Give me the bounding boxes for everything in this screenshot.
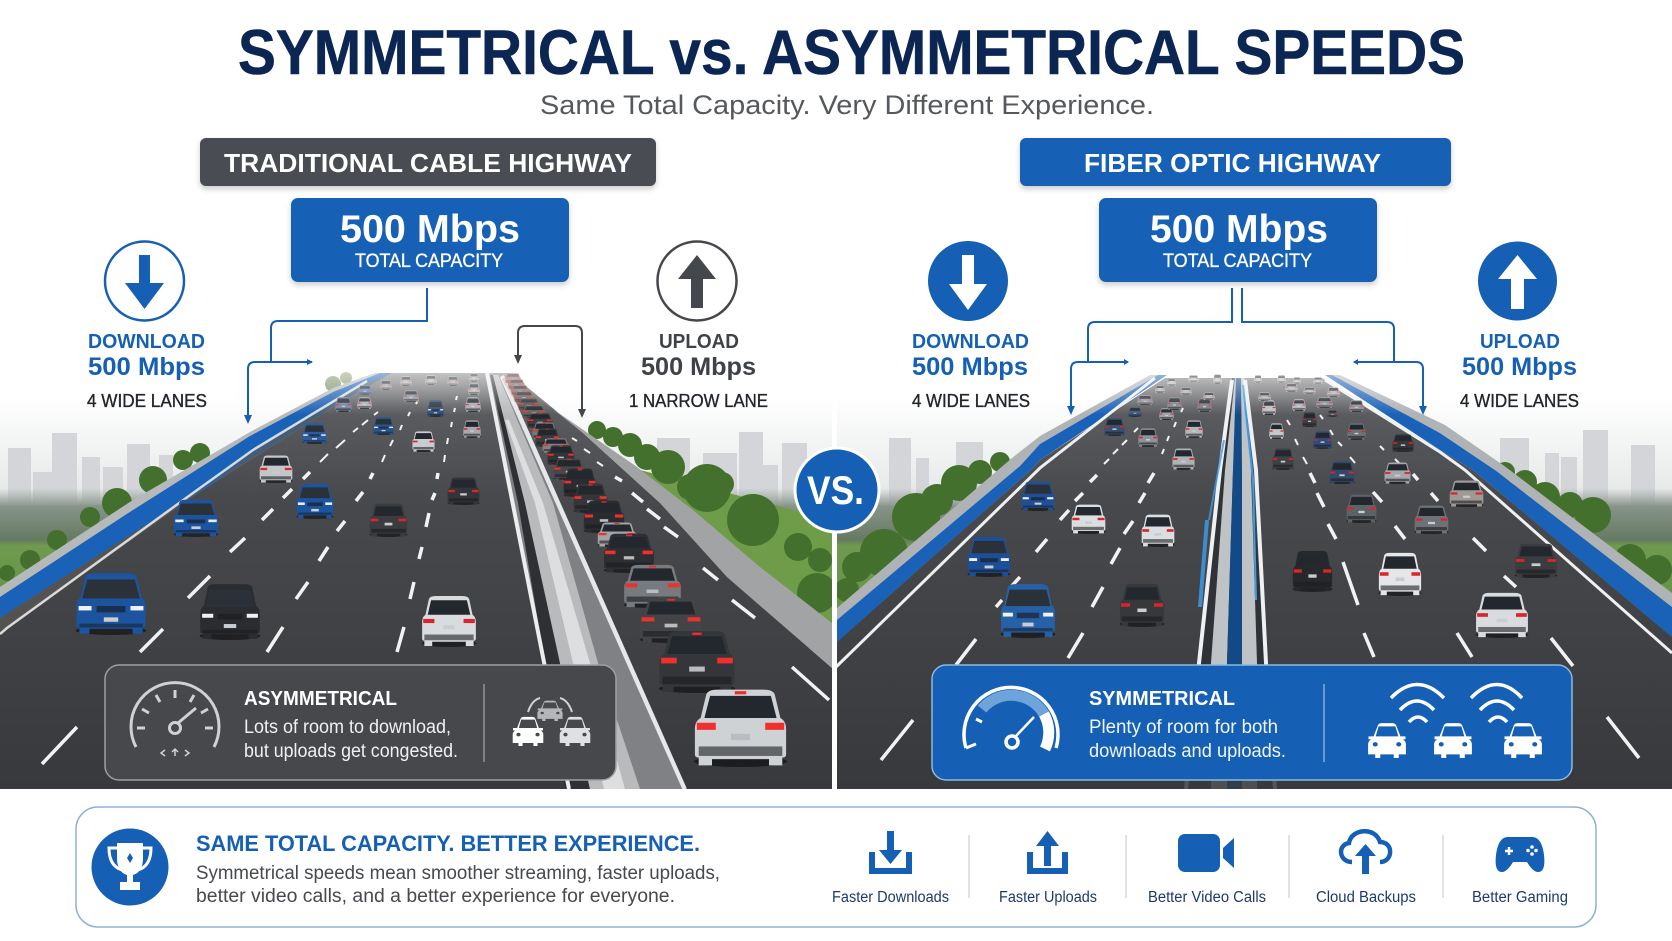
arrow: cable download connector	[244, 288, 427, 424]
icon: better video calls	[1148, 834, 1266, 906]
icon: congested cars	[513, 698, 590, 746]
text: fiber download stats: 500 Mbps	[912, 353, 1028, 381]
text: cable download stats: DOWNLOAD	[88, 331, 205, 353]
icon: faster uploads: Faster Uploads	[999, 889, 1097, 906]
icon: download circle filled	[928, 241, 1008, 321]
callout: symmetrical	[932, 665, 1572, 780]
arrow: cable upload connector	[514, 326, 586, 418]
text: fiber download stats: 4 WIDE LANES	[912, 391, 1030, 411]
text: symmetrical description: downloads and uploads.	[1089, 741, 1286, 762]
capacity box: cable: 500 Mbps	[340, 208, 520, 251]
icon: cloud backups	[1316, 831, 1416, 906]
lane dashes: cable	[42, 396, 829, 764]
text: summary: Symmetrical speeds mean smoother streaming, faster uploads,	[196, 863, 720, 884]
capacity box: fiber: 500 Mbps	[1150, 208, 1328, 251]
header: fiber optic highway	[1020, 138, 1451, 186]
text: fiber upload stats	[1460, 331, 1579, 411]
text: fiber upload stats: 4 WIDE LANES	[1460, 391, 1579, 411]
text: fiber download stats: DOWNLOAD	[912, 331, 1029, 353]
text: fiber upload stats: 500 Mbps	[1462, 353, 1577, 381]
icon: cloud backups: Cloud Backups	[1316, 889, 1416, 906]
icon: upload circle filled	[1478, 242, 1557, 320]
text: asymmetrical description: ASYMMETRICAL	[244, 688, 397, 710]
badge: VS: VS.	[807, 469, 864, 513]
text: summary: better video calls, and a better experience for everyone.	[196, 886, 675, 907]
text: cable upload stats: 500 Mbps	[641, 353, 756, 381]
text: summary	[196, 831, 720, 907]
header: traditional cable highway	[200, 138, 656, 186]
text: fiber download stats	[912, 331, 1030, 411]
icon: trophy	[92, 828, 168, 906]
panel: fiber highway scene	[835, 372, 1672, 789]
text: asymmetrical description: but uploads get congested.	[244, 741, 458, 762]
icon: better gaming: Better Gaming	[1472, 889, 1568, 906]
text: symmetrical description: Plenty of room for both	[1089, 717, 1278, 738]
text: asymmetrical description	[244, 688, 458, 762]
cars: fiber download lanes	[967, 374, 1222, 638]
icon: faster downloads: Faster Downloads	[832, 889, 949, 906]
icon: gauge high	[964, 687, 1058, 749]
text: cable download stats: 4 WIDE LANES	[87, 391, 207, 411]
icon: faster downloads	[832, 831, 949, 906]
text: asymmetrical description: Lots of room to download,	[244, 717, 451, 738]
header: traditional cable highway: TRADITIONAL CABLE HIGHWAY	[224, 148, 632, 178]
icon: faster uploads	[999, 831, 1097, 906]
capacity box: cable: TOTAL CAPACITY	[355, 251, 503, 272]
arrow: fiber connectors	[1067, 288, 1427, 415]
cars: download lanes	[76, 373, 481, 647]
header: fiber optic highway: FIBER OPTIC HIGHWAY	[1084, 148, 1381, 178]
capacity box: fiber: TOTAL CAPACITY	[1163, 251, 1312, 272]
icon: upload circle outline	[658, 242, 736, 320]
panel: bottom summary band	[76, 807, 1596, 927]
badge: VS	[795, 448, 879, 532]
text: cable upload stats: UPLOAD	[659, 331, 739, 353]
lane dashes: fiber	[881, 408, 1639, 760]
icon: better gaming	[1472, 837, 1568, 906]
text: cable download stats	[87, 331, 207, 411]
text: cable upload stats: 1 NARROW LANE	[629, 391, 768, 411]
text: cable download stats: 500 Mbps	[88, 353, 205, 381]
cars: fiber upload lanes	[1254, 375, 1558, 638]
title: SYMMETRICAL vs. ASYMMETRICAL SPEEDS	[238, 18, 1465, 88]
callout: asymmetrical	[105, 665, 616, 780]
cars: congested upload lane	[505, 373, 787, 767]
text: symmetrical description	[1089, 688, 1286, 762]
icon: download circle outline	[105, 242, 184, 320]
text: summary: SAME TOTAL CAPACITY. BETTER EXPERIENCE.	[196, 831, 700, 856]
text: fiber upload stats: UPLOAD	[1480, 331, 1560, 353]
text: cable upload stats	[629, 331, 768, 411]
text: symmetrical description: SYMMETRICAL	[1089, 688, 1235, 710]
capacity box: cable	[291, 198, 569, 282]
icon: connected cars	[1368, 684, 1542, 758]
icon: better video calls: Better Video Calls	[1148, 889, 1266, 906]
icon: gauge low	[131, 683, 219, 756]
panel: cable highway scene	[0, 372, 837, 789]
capacity box: fiber	[1099, 198, 1377, 282]
subtitle: Same Total Capacity. Very Different Experience.	[540, 90, 1154, 120]
